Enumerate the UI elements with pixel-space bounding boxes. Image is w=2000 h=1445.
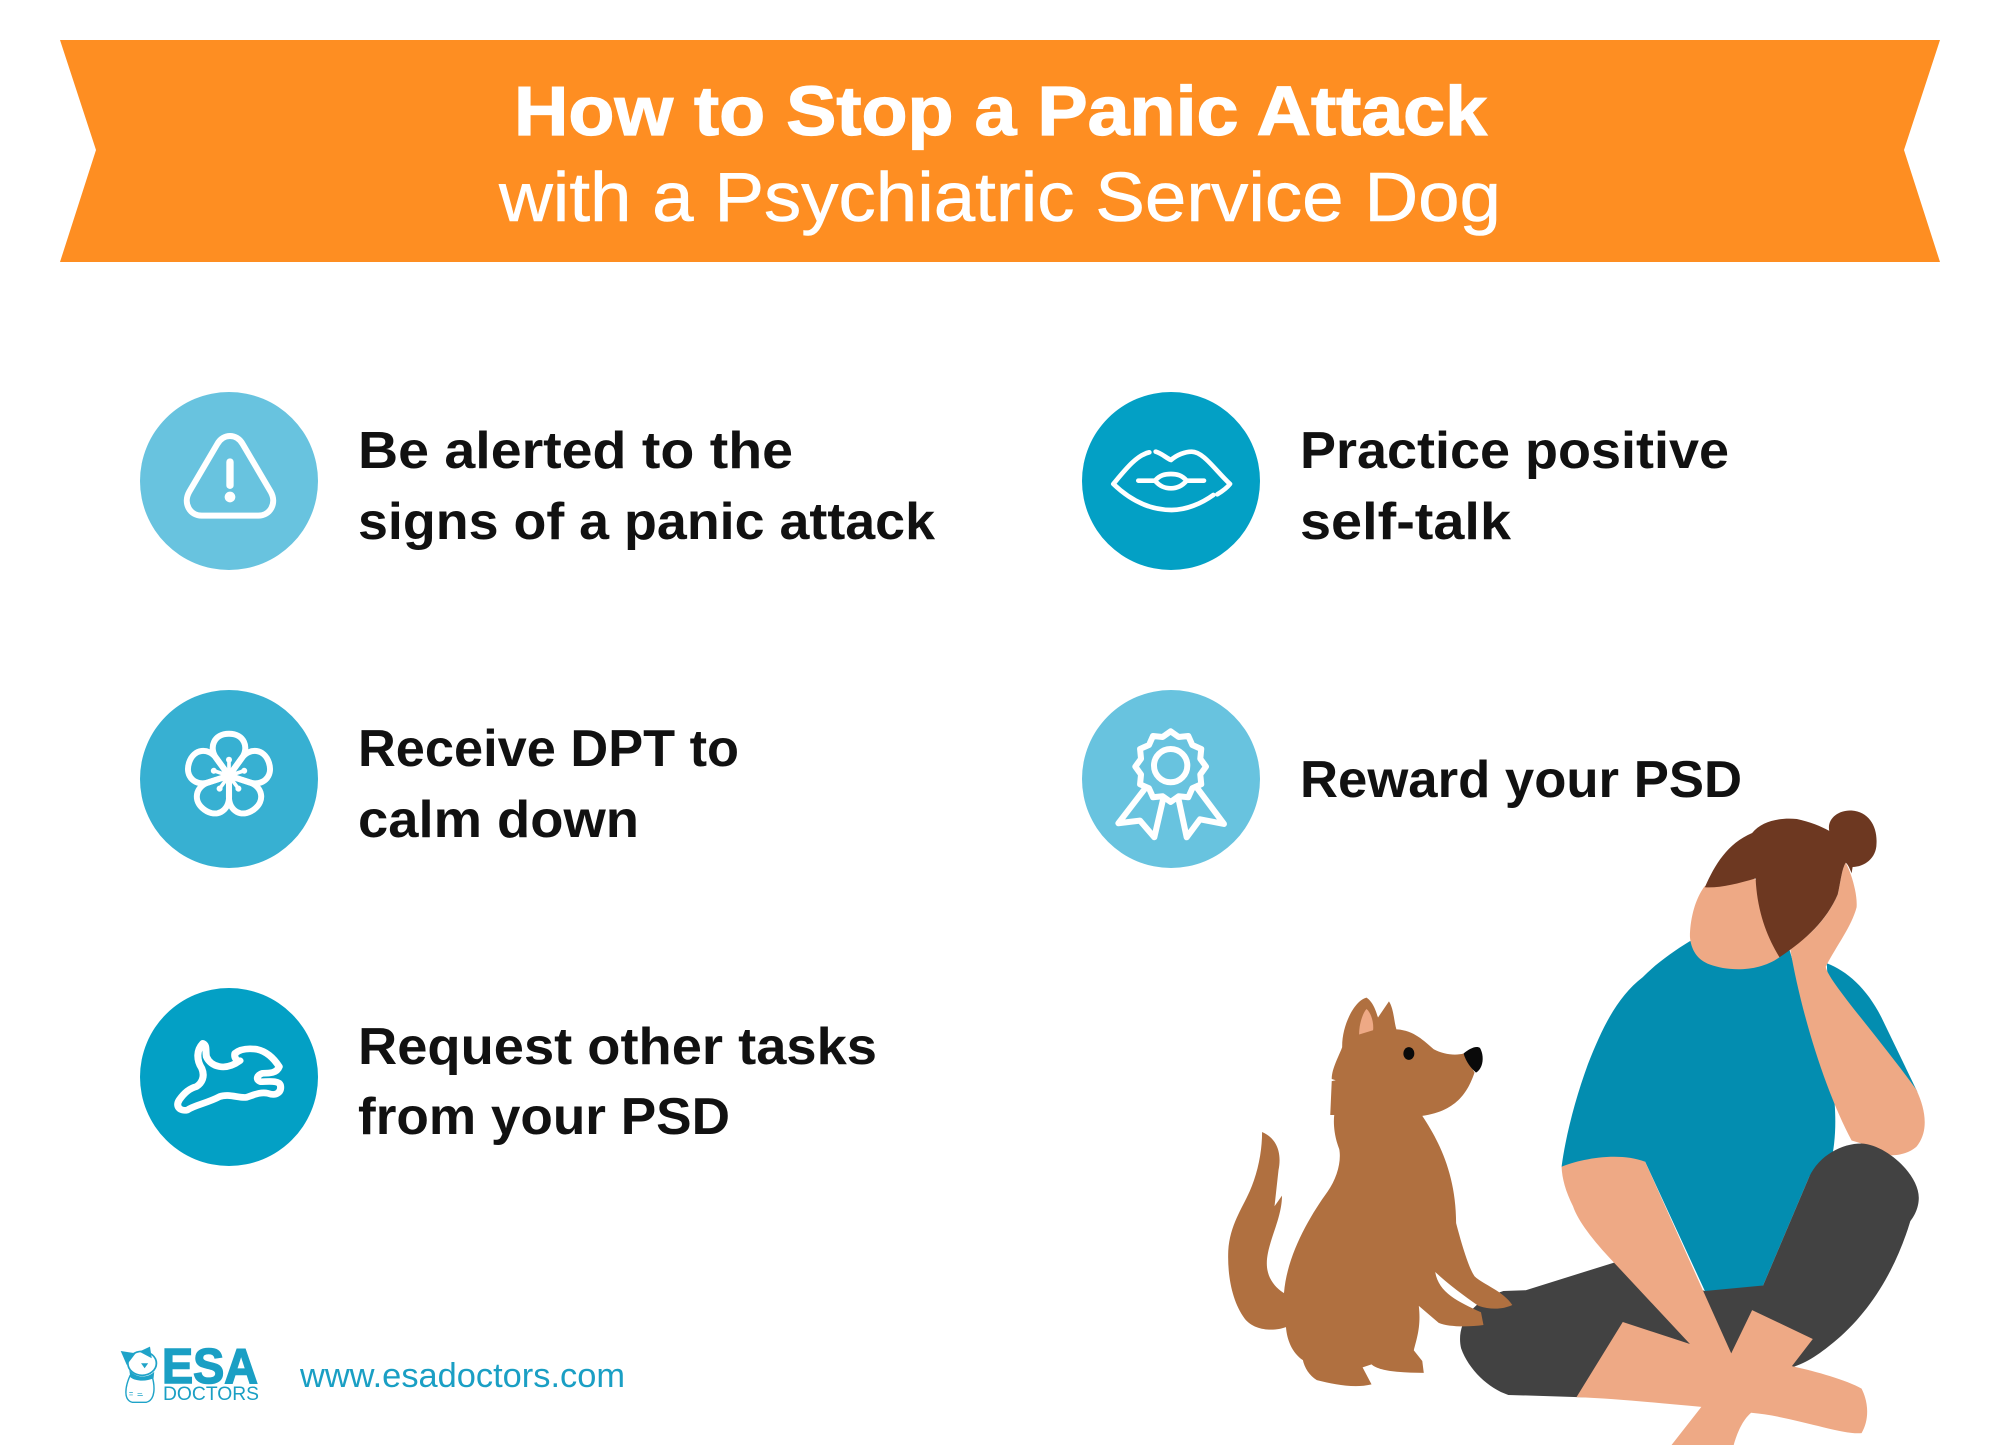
text: receive DPT: [358, 720, 739, 849]
icon: lips: [1113, 452, 1230, 510]
text: reward: Reward your PSD: [1300, 751, 1742, 809]
text: positive self-talk: self-talk: [1300, 493, 1511, 551]
icon: flower: [184, 734, 274, 819]
icon: warning triangle: [187, 436, 273, 516]
logo: ESA Doctors: DOCTORS: [163, 1384, 259, 1405]
dog: [1228, 998, 1512, 1386]
item: be alerted: [140, 392, 935, 570]
illustration: woman and dog: [1228, 810, 1925, 1445]
woman: [1460, 810, 1925, 1445]
text: be alerted: [358, 422, 935, 551]
subtitle: with a Psychiatric Service Dog: [498, 158, 1501, 236]
text: receive DPT: Receive DPT to: [358, 720, 739, 778]
text: request tasks: Request other tasks: [358, 1018, 877, 1076]
text: receive DPT: calm down: [358, 791, 639, 849]
logo wordmark: ESA: [162, 1340, 258, 1394]
text: request tasks: from your PSD: [358, 1088, 730, 1146]
logo: ESA Doctors: [121, 1340, 259, 1405]
text: positive self-talk: [1300, 422, 1729, 551]
logo mark: dog: [121, 1347, 156, 1402]
text: be alerted: signs of a panic attack: [358, 493, 935, 551]
title: How to Stop a Panic Attack: [514, 72, 1487, 150]
item: receive DPT: [140, 690, 739, 868]
icon: leaping dog: [178, 1043, 281, 1110]
text: be alerted: Be alerted to the: [358, 422, 793, 480]
website url: www.esadoctors.com: [299, 1357, 625, 1395]
text: request tasks: [358, 1018, 877, 1146]
item: reward: [1082, 690, 1742, 868]
header banner: [60, 40, 1940, 262]
item: request tasks: [140, 988, 877, 1166]
icon: rosette ribbon: [1118, 731, 1224, 837]
text: positive self-talk: Practice positive: [1300, 422, 1729, 480]
item: positive self-talk: [1082, 392, 1729, 570]
